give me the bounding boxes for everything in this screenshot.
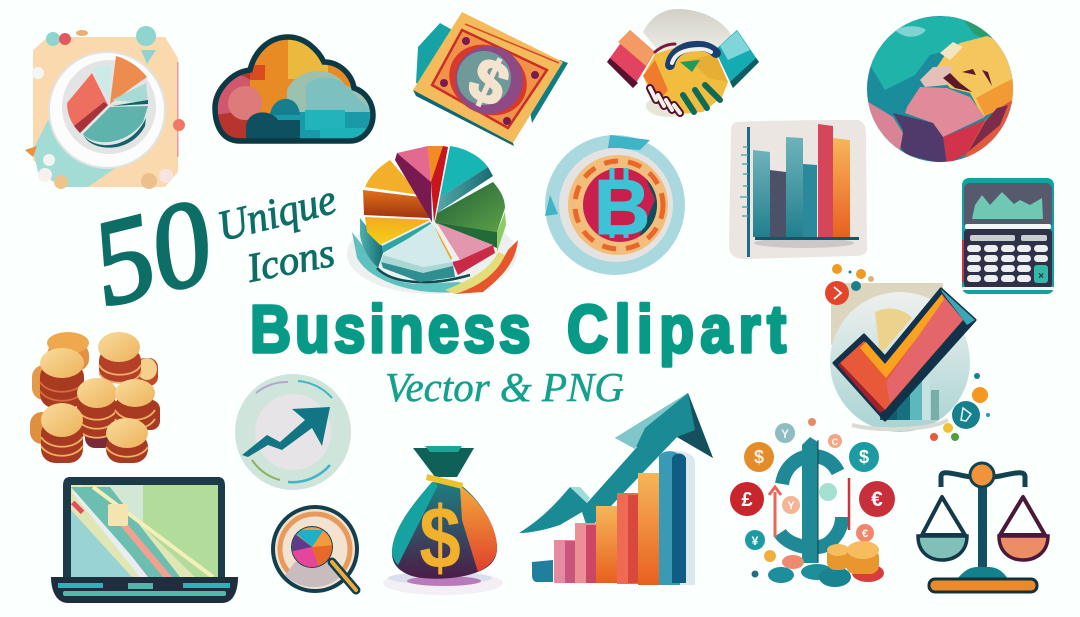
arrow	[242, 407, 330, 457]
keys	[967, 245, 1048, 283]
icon: money bag	[383, 446, 503, 595]
bars	[532, 451, 695, 585]
text: Unique: Unique	[213, 176, 341, 251]
up arrows	[769, 487, 781, 537]
icon: dollar banknote	[413, 12, 568, 146]
currency coins	[730, 418, 895, 578]
bottom coins	[768, 541, 884, 587]
icon: calculator	[962, 178, 1054, 294]
icon: check mark	[825, 264, 990, 441]
icon: coin stacks	[30, 332, 160, 463]
coin stack: back right	[98, 332, 141, 383]
arrow	[519, 393, 713, 533]
coin stack: middle right	[115, 379, 155, 431]
title: Business Clipart: Business	[250, 293, 534, 367]
icon: globe	[865, 15, 1020, 165]
text: Icons: Icons	[242, 229, 338, 291]
subtitle: Vector & PNG: Vector & PNG	[385, 364, 624, 410]
coin stack: left	[40, 348, 84, 408]
tick	[834, 289, 975, 420]
dollar sign: $	[459, 44, 519, 121]
icon: bar chart card	[729, 120, 867, 259]
bitcoin letter: B	[594, 163, 650, 251]
dollar symbol	[780, 437, 842, 563]
bars	[753, 124, 850, 237]
dollar sign: $	[419, 489, 461, 587]
currency coins: C	[832, 437, 839, 447]
icon: calculator: ×	[1038, 271, 1044, 282]
icon: pie chart on document	[25, 26, 185, 189]
currency coins: Y	[787, 500, 795, 512]
icon: growth arrow circle	[235, 374, 351, 490]
icon: 3D pie chart	[347, 146, 518, 294]
currency coins: €	[862, 528, 868, 540]
icon: handshake	[607, 9, 759, 117]
slices	[360, 146, 506, 282]
icon: laptop	[51, 477, 238, 603]
icon: balance scale	[918, 463, 1048, 592]
currency coins: $	[859, 447, 869, 467]
pie slices	[67, 56, 148, 148]
icon: magnifying glass	[273, 507, 357, 591]
currency coins: €	[871, 488, 883, 511]
currency coins: Y	[781, 427, 789, 441]
fingers	[650, 44, 720, 113]
icon: bitcoin medallion	[545, 135, 685, 275]
currency coins: ¥	[752, 534, 759, 548]
currency coins: £	[741, 489, 753, 511]
title: Business Clipart	[250, 293, 793, 367]
icon: currency cluster	[730, 418, 895, 587]
coin stack: front left	[41, 403, 83, 463]
dots	[825, 264, 990, 441]
text: 50: 50	[80, 173, 225, 332]
title: Business Clipart: Clipart	[567, 293, 793, 367]
icon: growth bars with arrow	[519, 393, 713, 585]
icon: cloud	[215, 35, 375, 145]
coin stack: middle	[77, 378, 117, 438]
base ring	[352, 232, 485, 292]
currency coins: $	[754, 447, 764, 467]
coin stack: front right	[106, 418, 148, 463]
